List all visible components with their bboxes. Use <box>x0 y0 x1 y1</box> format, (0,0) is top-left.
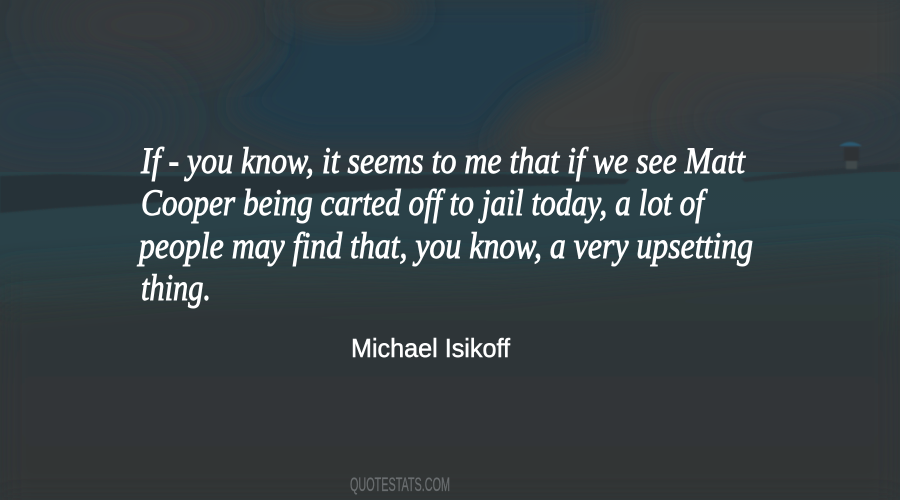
quote line 1: If - you know, it seems to me that if we see Matt <box>140 141 746 182</box>
quote line 2: Cooper being carted off to jail today, a lot of <box>141 183 708 224</box>
background: sky <box>0 0 900 190</box>
quote text <box>136 141 753 309</box>
quote line 4: thing. <box>141 268 211 309</box>
watermark: QUOTESTATS.COM <box>350 475 450 496</box>
author name: Michael Isikoff <box>351 333 511 363</box>
background: pier <box>740 163 900 182</box>
quote line 3: people may find that, you know, a very upsetting <box>136 226 753 267</box>
background: sea <box>0 172 900 310</box>
background: distant treeline <box>0 174 630 213</box>
background: sand <box>0 255 900 500</box>
icon: lifeguard tower <box>839 142 862 169</box>
